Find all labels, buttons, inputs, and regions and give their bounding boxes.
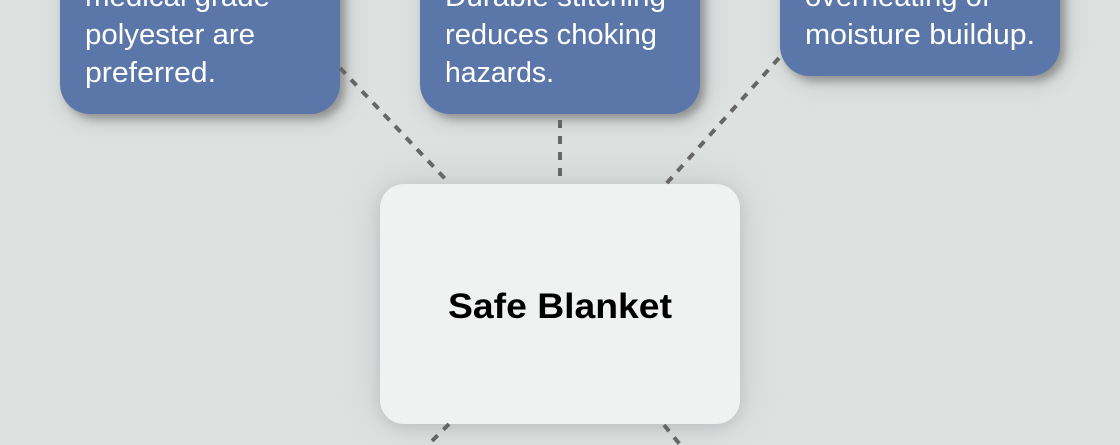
panel: material card <box>60 0 340 114</box>
connector: breathability card to centre <box>666 58 779 184</box>
text: material card: preferred. <box>85 57 216 89</box>
heading: Safe Blanket: Safe Blanket <box>448 287 672 326</box>
connector: centre to lower left <box>426 424 449 445</box>
text: stitching card: reduces choking <box>445 19 657 51</box>
connector: centre to lower right <box>664 425 682 445</box>
text: stitching card <box>445 0 666 89</box>
panel: breathability card <box>780 0 1060 76</box>
text: breathability card: moisture buildup. <box>805 19 1035 51</box>
text: stitching card: hazards. <box>445 57 554 89</box>
panel: stitching card <box>420 0 700 114</box>
connector: stitching card to centre <box>558 120 562 184</box>
text: breathability card <box>805 0 1035 51</box>
text: material card: polyester are <box>85 19 255 51</box>
panel: central node <box>380 184 740 424</box>
text: material card <box>85 0 270 89</box>
connector: material card to centre <box>340 68 450 184</box>
